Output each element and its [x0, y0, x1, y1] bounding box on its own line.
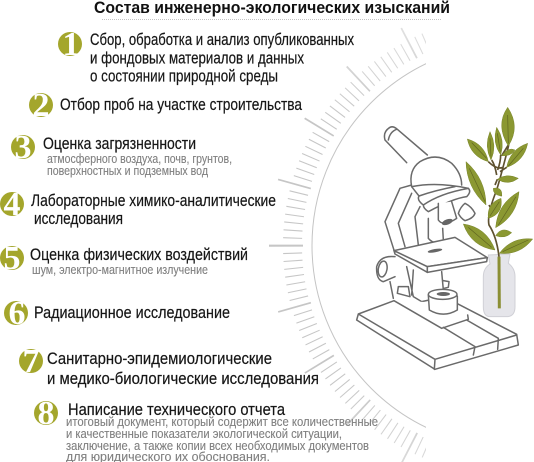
step 3: [11, 129, 232, 178]
step 8 text: Написание технического отчета: [68, 401, 286, 419]
plant: [463, 107, 533, 308]
step 3 text: атмосферного воздуха, почв, грунтов,: [47, 152, 232, 166]
step 8 text: и качественные показатели экологической ситуации,: [66, 427, 342, 441]
badge 1: 1: [62, 26, 80, 63]
step 4: [0, 186, 276, 228]
step 1 text: и фондовых материалов и данных: [90, 50, 305, 68]
step 1 text: [90, 31, 355, 86]
step 5 text: Оценка физических воздействий: [30, 246, 248, 264]
microscope: [357, 127, 518, 369]
step 1: [58, 26, 355, 86]
step 6 text: Радиационное исследование: [34, 304, 230, 322]
badge 6: 6: [8, 295, 26, 332]
step 8 text: заключение, а также копии всех необходимых документов: [66, 439, 369, 453]
ruler scale: [269, 28, 426, 462]
step 5 text: [30, 246, 248, 277]
badge 4: 4: [4, 186, 20, 223]
step 6: [4, 295, 230, 332]
step 5: [0, 240, 248, 277]
step 3 text: [43, 135, 232, 178]
step 8: [34, 395, 378, 462]
step 7 text: [47, 350, 319, 388]
step 1 text: Сбор, обработка и анализ опубликованных: [90, 31, 355, 49]
badge 2: 2: [32, 87, 50, 124]
step 8 text: [66, 401, 378, 462]
step 5 text: шум, электро-магнитное излучение: [32, 263, 208, 277]
step 8 text: итоговый документ, который содержит все количественные: [66, 415, 378, 429]
step 7: [19, 343, 319, 388]
step 3 text: Оценка загрязненности: [43, 135, 196, 153]
step 1 text: о состоянии природной среды: [90, 68, 278, 86]
step 7 text: и медико-биологические исследования: [47, 370, 319, 388]
illustration: microscope with plant in vase: [357, 107, 533, 369]
badge 3: 3: [14, 129, 32, 166]
vase: [483, 254, 515, 317]
step 2 text: Отбор проб на участке строительства: [60, 96, 303, 114]
badge 5: 5: [4, 240, 20, 277]
badge 7: 7: [22, 343, 40, 380]
step 3 text: поверхностных и подземных вод: [47, 164, 209, 178]
step 4 text: [31, 192, 276, 228]
step 2: [29, 87, 303, 124]
step 7 text: Санитарно-эпидемиологические: [47, 350, 272, 368]
badge 8: 8: [38, 395, 54, 432]
step 4 text: Лабораторные химико-аналитические: [31, 192, 276, 210]
step 4 text: исследования: [34, 210, 123, 228]
